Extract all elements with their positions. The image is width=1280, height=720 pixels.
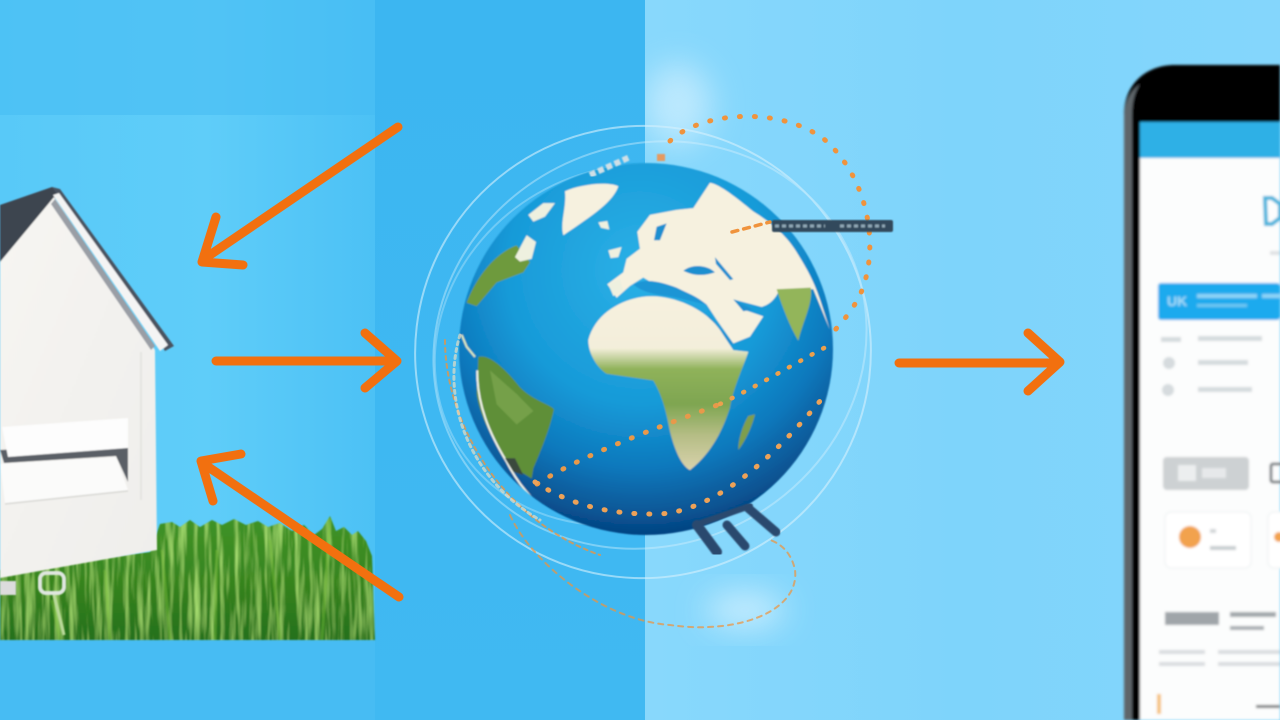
arrow: right pointing to phone xyxy=(899,333,1060,391)
info banner xyxy=(1158,283,1280,320)
Greenland xyxy=(562,184,618,235)
India xyxy=(777,288,811,341)
background panel: centre band xyxy=(375,0,645,720)
outline button xyxy=(1271,464,1280,482)
app subtitle line xyxy=(1270,251,1280,255)
house xyxy=(0,187,174,635)
info banner: UK xyxy=(1167,293,1187,309)
smartphone xyxy=(1124,65,1280,720)
house roof xyxy=(0,187,60,265)
clouds on right panel xyxy=(644,63,785,628)
phone screen xyxy=(1140,122,1280,720)
Black Sea xyxy=(683,266,715,275)
arrow: upper left pointing to house xyxy=(202,127,398,265)
continents xyxy=(462,183,830,514)
house trim xyxy=(140,352,142,500)
lower summary card xyxy=(1165,612,1276,630)
South America relief xyxy=(490,370,533,424)
Red Sea and Caspian xyxy=(708,257,753,344)
globe xyxy=(459,163,833,535)
phone side bezel xyxy=(1124,84,1140,720)
progress lines xyxy=(1159,650,1280,666)
arrow: middle pointing to globe xyxy=(216,333,397,388)
Central America xyxy=(462,335,475,357)
orange accent and home bar xyxy=(1157,694,1280,714)
arrow: lower left pointing to house xyxy=(201,454,399,597)
southern dark tip xyxy=(505,458,523,475)
Iceland and British Isles xyxy=(609,288,616,297)
dashed link to top satellite xyxy=(732,222,770,232)
grey button xyxy=(1163,457,1249,490)
bottom satellite xyxy=(695,506,776,552)
lower dotted curve xyxy=(535,395,825,514)
background panel: right sky xyxy=(645,0,1280,720)
globe ocean xyxy=(459,163,833,535)
app logo mark xyxy=(1265,198,1280,224)
globe orbit rings: white xyxy=(364,71,934,629)
faint outer dashed loop xyxy=(510,515,795,627)
detail rows xyxy=(1161,336,1262,396)
Andes edge xyxy=(474,369,534,497)
stat card xyxy=(1165,512,1251,568)
Arctic islands xyxy=(515,203,622,262)
Madagascar xyxy=(738,414,755,450)
app header bar xyxy=(1140,122,1280,158)
house wall xyxy=(0,197,157,578)
north pole marker xyxy=(590,154,665,175)
Baltic sea xyxy=(654,223,667,240)
phone body xyxy=(1124,65,1280,720)
North America xyxy=(467,245,530,306)
top satellite xyxy=(772,220,893,232)
upper dotted orbit xyxy=(670,116,870,340)
South America xyxy=(477,356,554,479)
grass xyxy=(0,516,375,640)
front dotted curve across the globe xyxy=(537,404,720,484)
Mediterranean sea xyxy=(633,281,707,304)
Eurasia xyxy=(607,183,830,343)
orange dotted flight paths xyxy=(445,116,870,627)
house foot bracket xyxy=(0,573,64,635)
Africa xyxy=(588,296,748,470)
house roof edge xyxy=(51,187,174,351)
background panel: left sky xyxy=(0,0,375,720)
left dashed orbit strands xyxy=(445,340,600,555)
house vent louvres xyxy=(0,418,128,504)
second stat card xyxy=(1268,512,1280,568)
